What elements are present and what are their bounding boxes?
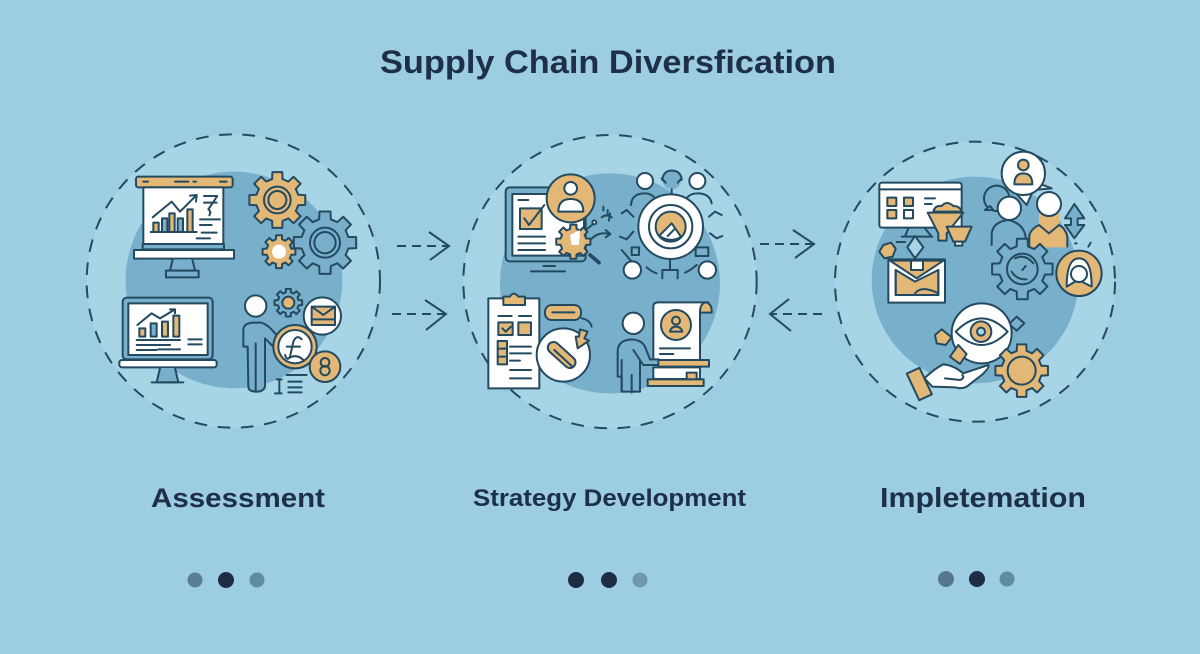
label: Assessment: Assessment (151, 483, 325, 513)
icon: dashboard monitor with funnels (879, 183, 972, 246)
icon: monitor with checklist and profile (506, 174, 612, 271)
panel: strategy development illustration (463, 135, 757, 428)
icon: presenter with document (618, 302, 712, 393)
icon: team with speech bubbles (984, 152, 1084, 247)
icon: envelope with hexagon (879, 236, 945, 303)
arrow: implementation to strategy, lower (770, 299, 822, 331)
pagination dots: implementation (938, 571, 1014, 587)
dashed circle (463, 135, 757, 428)
icon: presentation screen with chart (134, 177, 234, 277)
dashed circle (835, 142, 1115, 422)
label: Strategy Development: Strategy Development (473, 485, 746, 512)
title: Supply Chain Diversfication (380, 44, 836, 80)
blue backdrop (126, 172, 342, 388)
icon: analyst with magnifier and coins (243, 295, 341, 393)
icon: clipboard with paperclip (488, 294, 592, 388)
icon: team around a central target (620, 171, 722, 279)
panel: implementation illustration (835, 142, 1115, 422)
label: Implementation: Impletemation (880, 482, 1086, 513)
icon: hand holding eye and gear (907, 303, 1048, 400)
panel: assessment illustration (87, 134, 380, 428)
blue backdrop (500, 173, 720, 393)
icon: laptop with chart (119, 298, 217, 382)
pagination dots: strategy (568, 572, 648, 588)
arrow: assessment to strategy, lower (392, 300, 446, 330)
blue backdrop (872, 177, 1078, 383)
arrow: assessment to strategy, upper (397, 232, 449, 260)
pagination dots: assessment (188, 572, 264, 588)
icon: gears (249, 172, 356, 316)
icon: blue gear and avatar (992, 239, 1102, 299)
arrow: strategy to implementation, upper (760, 230, 814, 258)
dashed circle (87, 134, 380, 428)
